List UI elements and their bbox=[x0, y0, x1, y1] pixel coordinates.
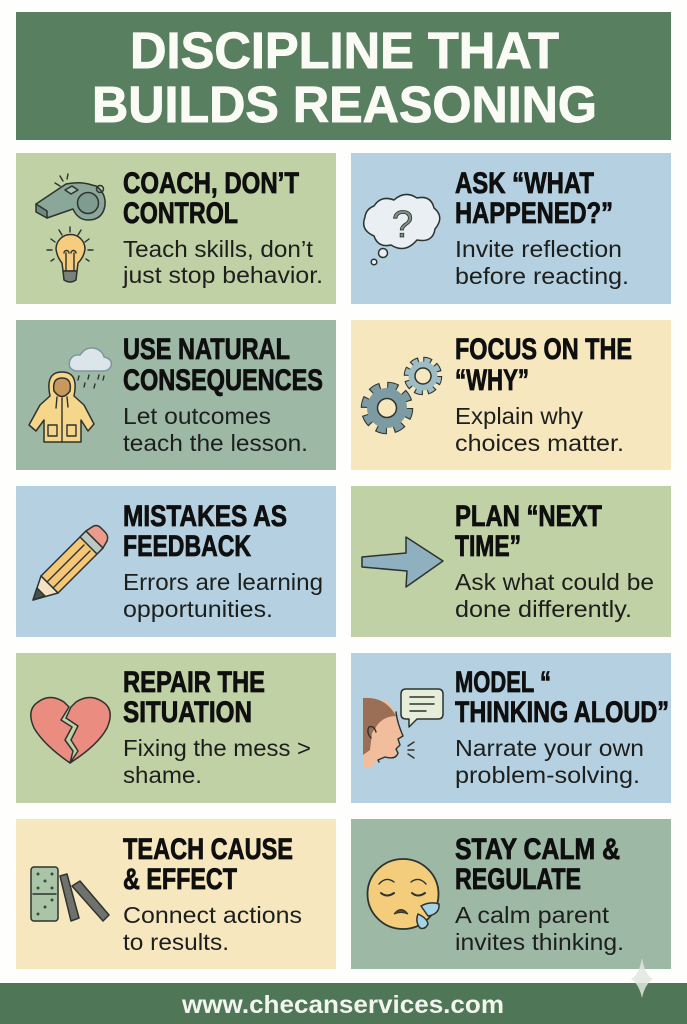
icon: broken heart bbox=[31, 698, 110, 763]
body text: Fixing the mess > bbox=[123, 735, 311, 761]
body text bbox=[122, 236, 323, 288]
body text bbox=[123, 403, 308, 456]
heading: FEEDBACK bbox=[123, 530, 251, 563]
heading: FOCUS ON THE bbox=[455, 333, 632, 366]
heading bbox=[455, 167, 613, 230]
icon: thought cloud with question mark: ? bbox=[392, 204, 413, 246]
body text bbox=[455, 569, 654, 622]
body text: just stop behavior. bbox=[122, 262, 323, 288]
panel: stay calm and regulate bbox=[351, 819, 671, 969]
heading: “WHY” bbox=[455, 364, 529, 397]
icon: arrow bbox=[362, 537, 443, 587]
body text: teach the lesson. bbox=[123, 430, 308, 456]
heading: ASK “WHAT bbox=[455, 167, 594, 200]
panel: repair the situation bbox=[16, 653, 336, 803]
title banner: BUILDS REASONING bbox=[92, 76, 597, 133]
body text: Invite reflection bbox=[455, 236, 622, 262]
heading: USE NATURAL bbox=[123, 333, 290, 366]
heading: HAPPENED?” bbox=[455, 197, 613, 230]
icon: gears bbox=[366, 361, 438, 429]
panel: use natural consequences bbox=[16, 320, 336, 470]
icon: thought cloud with question mark bbox=[364, 194, 440, 265]
panel: plan next time bbox=[351, 486, 671, 637]
heading bbox=[455, 833, 620, 896]
body text: invites thinking. bbox=[455, 929, 624, 955]
heading: MISTAKES AS bbox=[123, 500, 287, 533]
body text bbox=[455, 236, 629, 289]
footer bar: www.checanservices.com bbox=[181, 991, 504, 1019]
heading bbox=[455, 666, 669, 729]
icon: calm face bbox=[368, 859, 439, 929]
icon: whistle bbox=[36, 174, 105, 220]
body text: opportunities. bbox=[123, 596, 273, 622]
body text: problem-solving. bbox=[455, 762, 640, 788]
body text bbox=[455, 403, 624, 456]
heading bbox=[123, 666, 265, 729]
heading: COACH, DON’T bbox=[123, 167, 299, 200]
body text bbox=[455, 735, 644, 788]
heading: STAY CALM & bbox=[455, 833, 620, 866]
body text: Narrate your own bbox=[455, 735, 644, 761]
panel: focus on the why bbox=[351, 320, 671, 470]
heading bbox=[123, 333, 323, 397]
sparkle mark bbox=[631, 958, 653, 998]
panel: ask what happened bbox=[351, 153, 671, 304]
body text: choices matter. bbox=[455, 430, 624, 456]
icon: speech bubble bbox=[401, 689, 443, 727]
heading bbox=[123, 500, 287, 563]
heading bbox=[455, 333, 632, 397]
body text: Ask what could be bbox=[455, 569, 654, 595]
body text: Errors are learning bbox=[123, 569, 323, 595]
body text: A calm parent bbox=[455, 902, 610, 928]
heading: TEACH CAUSE bbox=[123, 833, 293, 866]
icon: light bulb bbox=[47, 227, 93, 282]
heading: & EFFECT bbox=[123, 863, 237, 896]
body text: Let outcomes bbox=[123, 403, 271, 429]
body text: before reacting. bbox=[455, 263, 629, 289]
body text: Connect actions bbox=[123, 902, 302, 928]
body text bbox=[455, 902, 624, 955]
panel: coach, don't control bbox=[16, 153, 336, 304]
heading: REPAIR THE bbox=[123, 666, 265, 699]
title banner: DISCIPLINE THAT bbox=[130, 22, 559, 79]
body text: Explain why bbox=[455, 403, 583, 429]
body text: done differently. bbox=[455, 596, 632, 622]
heading: CONSEQUENCES bbox=[123, 364, 323, 397]
heading: PLAN “NEXT bbox=[455, 500, 602, 533]
icon: rain cloud bbox=[69, 348, 111, 388]
title banner bbox=[16, 12, 671, 140]
icon: speaking head bbox=[363, 698, 414, 767]
body text bbox=[123, 902, 302, 955]
icon: yellow raincoat bbox=[29, 372, 94, 442]
icon: pencil bbox=[33, 526, 108, 600]
heading bbox=[455, 500, 602, 563]
heading bbox=[123, 167, 299, 230]
heading: CONTROL bbox=[123, 197, 238, 230]
heading bbox=[123, 833, 293, 896]
body text bbox=[123, 735, 311, 788]
footer bar bbox=[0, 983, 687, 1024]
body text: Teach skills, don’t bbox=[123, 236, 313, 262]
icon: dominoes bbox=[31, 867, 109, 921]
heading: SITUATION bbox=[123, 696, 252, 729]
heading: TIME” bbox=[455, 530, 521, 563]
panel: model thinking aloud bbox=[351, 653, 671, 803]
heading: REGULATE bbox=[455, 863, 581, 896]
panel: mistakes as feedback bbox=[16, 486, 336, 637]
panel: teach cause and effect bbox=[16, 819, 336, 969]
body text: shame. bbox=[123, 762, 202, 788]
body text bbox=[123, 569, 323, 622]
heading: MODEL “ bbox=[455, 666, 551, 699]
body text: to results. bbox=[123, 929, 229, 955]
